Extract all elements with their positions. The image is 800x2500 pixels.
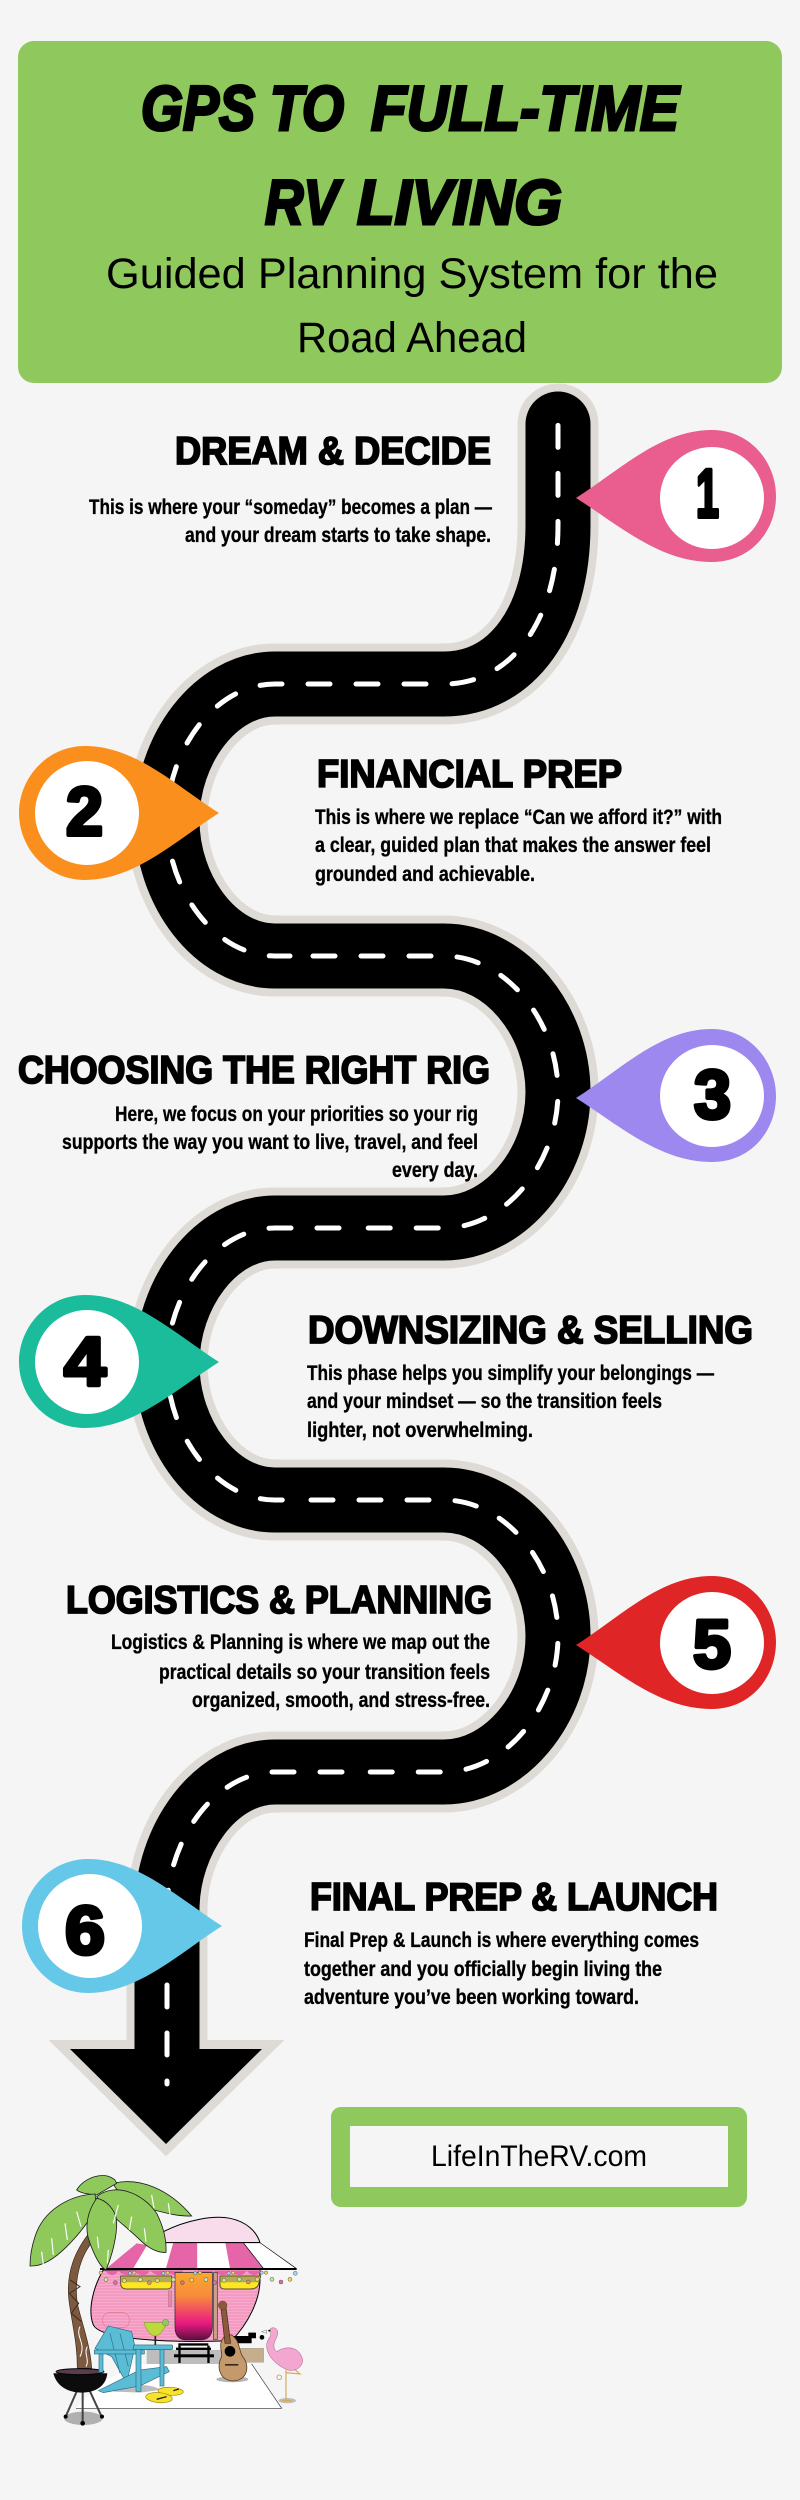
- margarita glass: [144, 2319, 169, 2345]
- palm tree: [30, 2176, 192, 2368]
- camper body: [91, 2217, 297, 2341]
- title: GPS TO: [141, 74, 344, 144]
- pin 1: 1: [696, 455, 719, 532]
- step 3 text: [62, 1103, 478, 1182]
- step 4 heading: DOWNSIZING & SELLING: [308, 1309, 753, 1352]
- step 2 text: This is where we replace “Can we afford it?” with: [315, 806, 722, 829]
- step 6 text: Final Prep & Launch is where everything comes: [304, 1929, 699, 1952]
- header panel: [18, 41, 782, 383]
- step 6 text: [304, 1929, 699, 2009]
- website box: [331, 2107, 747, 2207]
- pin 3: 3: [694, 1056, 731, 1133]
- pin 5: 5: [693, 1606, 731, 1683]
- pin 4: [19, 1295, 219, 1428]
- step 2 heading: FINANCIAL PREP: [317, 753, 622, 796]
- picnic table: [174, 2343, 214, 2363]
- step 1 text: [89, 496, 492, 547]
- step 5 heading: LOGISTICS & PLANNING: [66, 1579, 492, 1622]
- step 4 text: lighter, not overwhelming.: [307, 1419, 533, 1442]
- pin 6: 6: [65, 1892, 105, 1969]
- title: [141, 74, 681, 238]
- website box: LifeInTheRV.com: [431, 2140, 647, 2173]
- step 6 text: together and you officially begin living the: [304, 1958, 662, 1981]
- illustration: camper, palm tree and patio: [30, 2176, 303, 2426]
- subtitle: Guided Planning System for the: [106, 250, 718, 298]
- step 5 text: Logistics & Planning is where we map out the: [111, 1631, 490, 1654]
- pin 4: 4: [64, 1323, 106, 1400]
- step 5 text: practical details so your transition feels: [159, 1661, 490, 1684]
- hitch: [230, 2333, 264, 2362]
- ground mat: [76, 2350, 282, 2408]
- title: RV: [265, 168, 343, 238]
- flip flops: [145, 2387, 184, 2404]
- title: FULL-TIME: [371, 74, 681, 144]
- pin 2: 2: [66, 773, 103, 850]
- step 6 heading: FINAL PREP & LAUNCH: [310, 1876, 718, 1919]
- step 3 text: Here, we focus on your priorities so your rig: [115, 1103, 478, 1126]
- step 1 text: and your dream starts to take shape.: [185, 524, 491, 547]
- step 4 text: This phase helps you simplify your belongings —: [307, 1362, 714, 1385]
- step 3 text: every day.: [392, 1159, 478, 1182]
- pin 1: [576, 430, 776, 562]
- flamingo: [260, 2328, 303, 2403]
- pin 3: [576, 1029, 776, 1162]
- pin 5: [576, 1576, 776, 1709]
- string lights: [99, 2271, 297, 2285]
- step 5 text: [111, 1631, 490, 1712]
- step 2 text: a clear, guided plan that makes the answer feel: [315, 834, 711, 857]
- step 6 text: adventure you’ve been working toward.: [304, 1986, 639, 2009]
- grill: [53, 2369, 107, 2426]
- step 1 text: This is where your “someday” becomes a plan —: [89, 496, 492, 519]
- step 4 text: [307, 1362, 714, 1442]
- guitar: [216, 2301, 248, 2382]
- adirondack chair: [94, 2326, 173, 2393]
- step 2 text: [315, 806, 722, 886]
- step 5 text: organized, smooth, and stress-free.: [192, 1689, 490, 1712]
- step 4 text: and your mindset — so the transition feels: [307, 1390, 662, 1413]
- pin 2: [19, 746, 219, 880]
- step 3 heading: CHOOSING THE RIGHT RIG: [18, 1049, 490, 1092]
- title: LIVING: [357, 168, 562, 238]
- step 1 heading: DREAM & DECIDE: [175, 430, 491, 473]
- pin 6: [22, 1859, 222, 1993]
- step 3 text: supports the way you want to live, travel, and feel: [62, 1131, 478, 1154]
- winding road with arrow: [51, 424, 558, 2155]
- subtitle: [106, 250, 718, 362]
- step 2 text: grounded and achievable.: [315, 863, 535, 886]
- subtitle: Road Ahead: [297, 314, 527, 362]
